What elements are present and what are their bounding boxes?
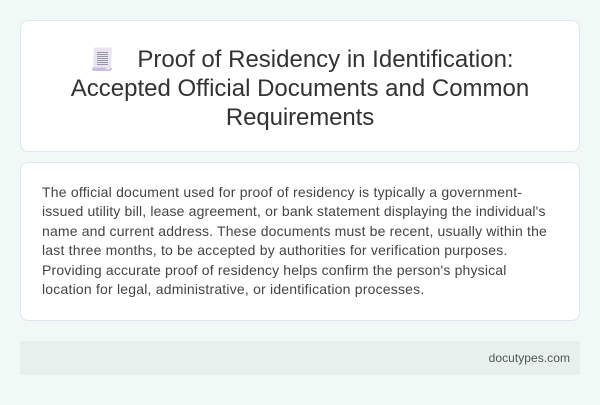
panel: description card xyxy=(20,162,580,321)
title: Proof of Residency in Identification: xyxy=(137,46,514,73)
description text: last three months, to be accepted by authorities for verification purposes. xyxy=(42,242,508,258)
description text xyxy=(42,184,547,297)
footer bar xyxy=(20,341,580,375)
icon: document receipt xyxy=(92,47,112,71)
description text: The official document used for proof of residency is typically a government- xyxy=(42,184,522,200)
title: Accepted Official Documents and Common xyxy=(71,75,529,102)
footer text: docutypes.com xyxy=(489,351,570,365)
description text: Providing accurate proof of residency helps confirm the person's physical xyxy=(42,262,507,278)
title xyxy=(70,46,529,131)
description text: location for legal, administrative, or identification processes. xyxy=(42,281,424,297)
description text: name and current address. These documents must be recent, usually within the xyxy=(42,223,547,239)
description text: issued utility bill, lease agreement, or bank statement displaying the individual's xyxy=(42,203,546,219)
panel: title card xyxy=(20,20,580,152)
title: Requirements xyxy=(226,104,374,131)
